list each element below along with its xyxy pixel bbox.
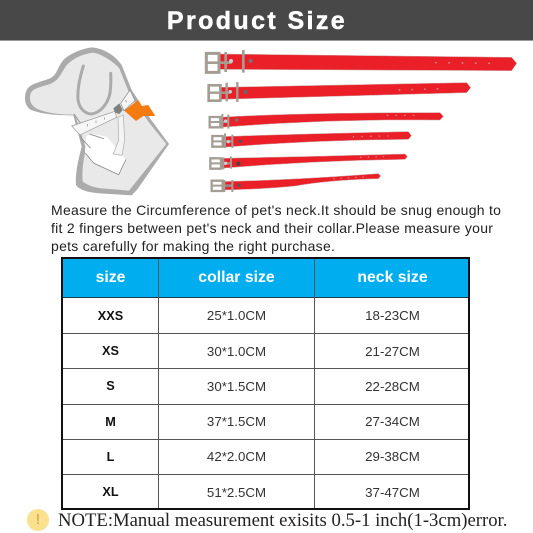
size table: size xyxy=(96,269,125,286)
instructions text: Measure the Circumference of pet's neck.It should be snug enough to xyxy=(51,202,501,218)
illustration: dog neck measurement xyxy=(25,47,169,195)
row XS: XS xyxy=(102,344,119,358)
hand xyxy=(85,133,126,175)
size table: 21-27CM xyxy=(365,344,420,359)
title banner xyxy=(0,0,533,41)
size table: 30*1.5CM xyxy=(207,379,266,394)
icon: warning note xyxy=(27,509,49,531)
arrow xyxy=(124,100,155,121)
ear xyxy=(78,66,111,114)
size table: 42*2.0CM xyxy=(207,449,266,464)
collar 1 xyxy=(206,50,517,73)
collar 6 xyxy=(212,174,381,192)
size table: 27-34CM xyxy=(365,414,420,429)
size table: 37-47CM xyxy=(365,485,420,500)
collar 2 xyxy=(209,82,471,102)
row S: S xyxy=(106,379,115,393)
size table: 18-23CM xyxy=(365,308,420,323)
row L: L xyxy=(107,450,114,464)
size table: 29-38CM xyxy=(365,449,420,464)
note text: NOTE:Manual measurement exisits 0.5-1 inch(1-3cm)error. xyxy=(58,510,507,531)
table header xyxy=(62,258,470,298)
size table: neck size xyxy=(357,269,428,286)
row XL: XL xyxy=(102,485,119,499)
size table: 30*1.0CM xyxy=(207,344,266,359)
instructions text xyxy=(51,202,501,254)
instructions text: fit 2 fingers between pet's neck and their collar.Please measure your xyxy=(51,220,493,236)
icon: warning note: ! xyxy=(36,511,40,528)
size table: 51*2.5CM xyxy=(207,485,266,500)
measuring tape xyxy=(72,90,135,155)
size table: 25*1.0CM xyxy=(207,308,266,323)
collar 4 xyxy=(212,132,411,148)
collar 3 xyxy=(210,113,443,129)
size table: 37*1.5CM xyxy=(207,414,266,429)
title banner: Product Size xyxy=(167,7,347,35)
collars xyxy=(206,50,517,192)
instructions text: pets carefully for making the right purchase. xyxy=(51,238,335,254)
row M: M xyxy=(105,415,116,429)
collar 5 xyxy=(210,154,407,169)
size table: 22-28CM xyxy=(365,379,420,394)
row XXS: XXS xyxy=(98,309,123,323)
size table: collar size xyxy=(198,269,275,286)
